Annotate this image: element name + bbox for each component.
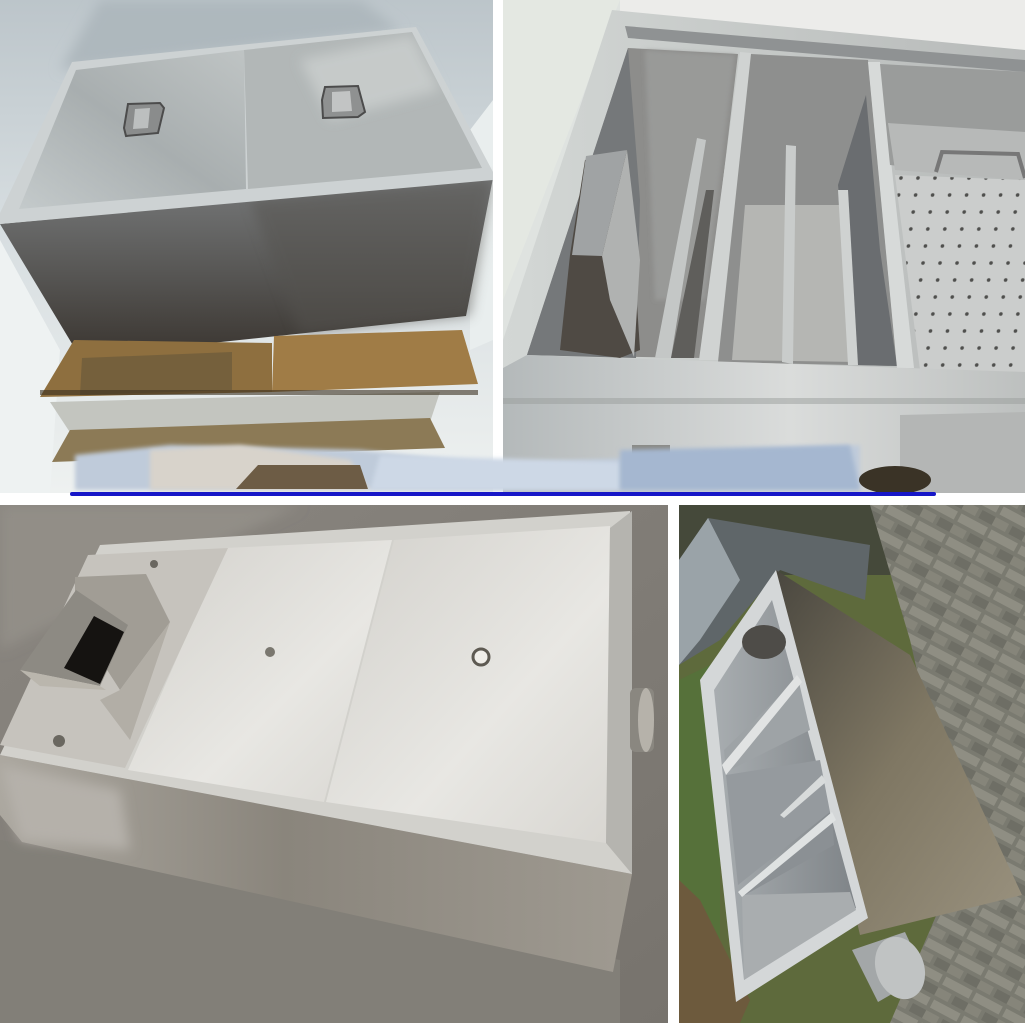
panel: open tank lying on its side on brick path: [679, 505, 1025, 1023]
panel: closed tank with three lids on concrete floor: [0, 505, 668, 1023]
front face: [503, 355, 1025, 493]
panel: open tank with baffles and perforated basket: [503, 0, 1025, 493]
lid handles: [124, 86, 365, 136]
inlet hopper: [20, 574, 170, 740]
tank body outer side: [776, 570, 1022, 935]
chamber one: [527, 48, 738, 358]
panel: closed box with two handled lids on cardboard: [0, 0, 493, 493]
chamber two: [718, 54, 897, 366]
box front face: [0, 178, 493, 357]
box lid: [0, 27, 493, 224]
inlet hole: [742, 625, 786, 659]
outlet pipe: [630, 688, 654, 752]
tank rim: [503, 10, 1025, 380]
tank interior: [700, 570, 868, 1002]
rear tank: [679, 518, 870, 665]
lid bolts: [150, 560, 158, 568]
tank top: [0, 511, 632, 874]
baffle one: [655, 138, 706, 358]
blue line: [70, 492, 936, 496]
outlet pipe: [852, 932, 925, 1002]
divider two: [838, 190, 858, 365]
cardboard: [40, 340, 272, 397]
divider one: [699, 52, 751, 360]
tank front: [0, 755, 632, 972]
smeared lower band with blue line: [70, 445, 936, 496]
baffle two: [782, 145, 796, 364]
basket area: [880, 64, 1025, 166]
